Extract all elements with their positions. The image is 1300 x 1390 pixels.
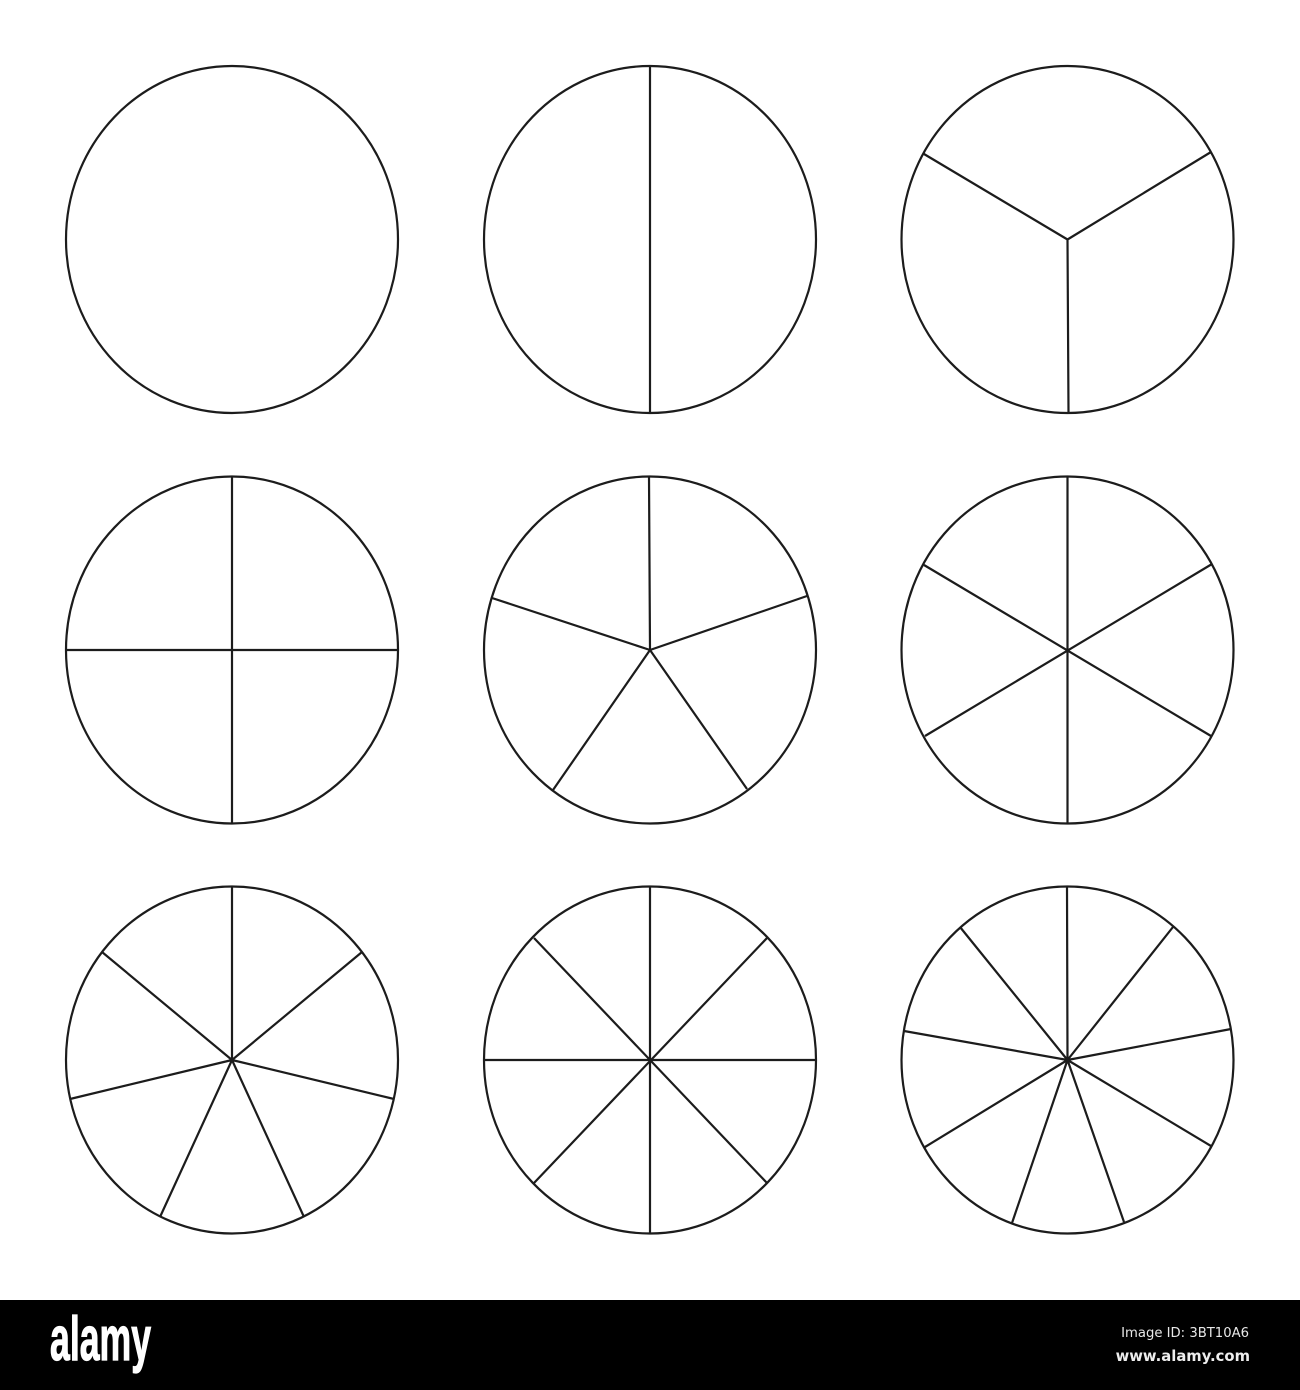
circles grid <box>66 66 1234 1234</box>
footer bar <box>0 1300 1300 1390</box>
circle: 2 segments <box>484 66 816 413</box>
image id: Image ID: 3BT10A6 <box>1121 1326 1249 1341</box>
circle: 9 segments <box>902 886 1234 1234</box>
circle: 4 segments <box>66 476 398 824</box>
circle: 5 segments <box>484 476 816 824</box>
circle: 6 segments <box>902 476 1234 824</box>
circle: 3 segments <box>902 66 1234 413</box>
circle: 7 segments <box>66 886 398 1234</box>
website: www.alamy.com <box>1116 1348 1250 1365</box>
circle: 8 segments <box>484 886 816 1234</box>
circle: 1 segment <box>66 66 398 413</box>
logo: alamy: alamy <box>50 1304 151 1373</box>
